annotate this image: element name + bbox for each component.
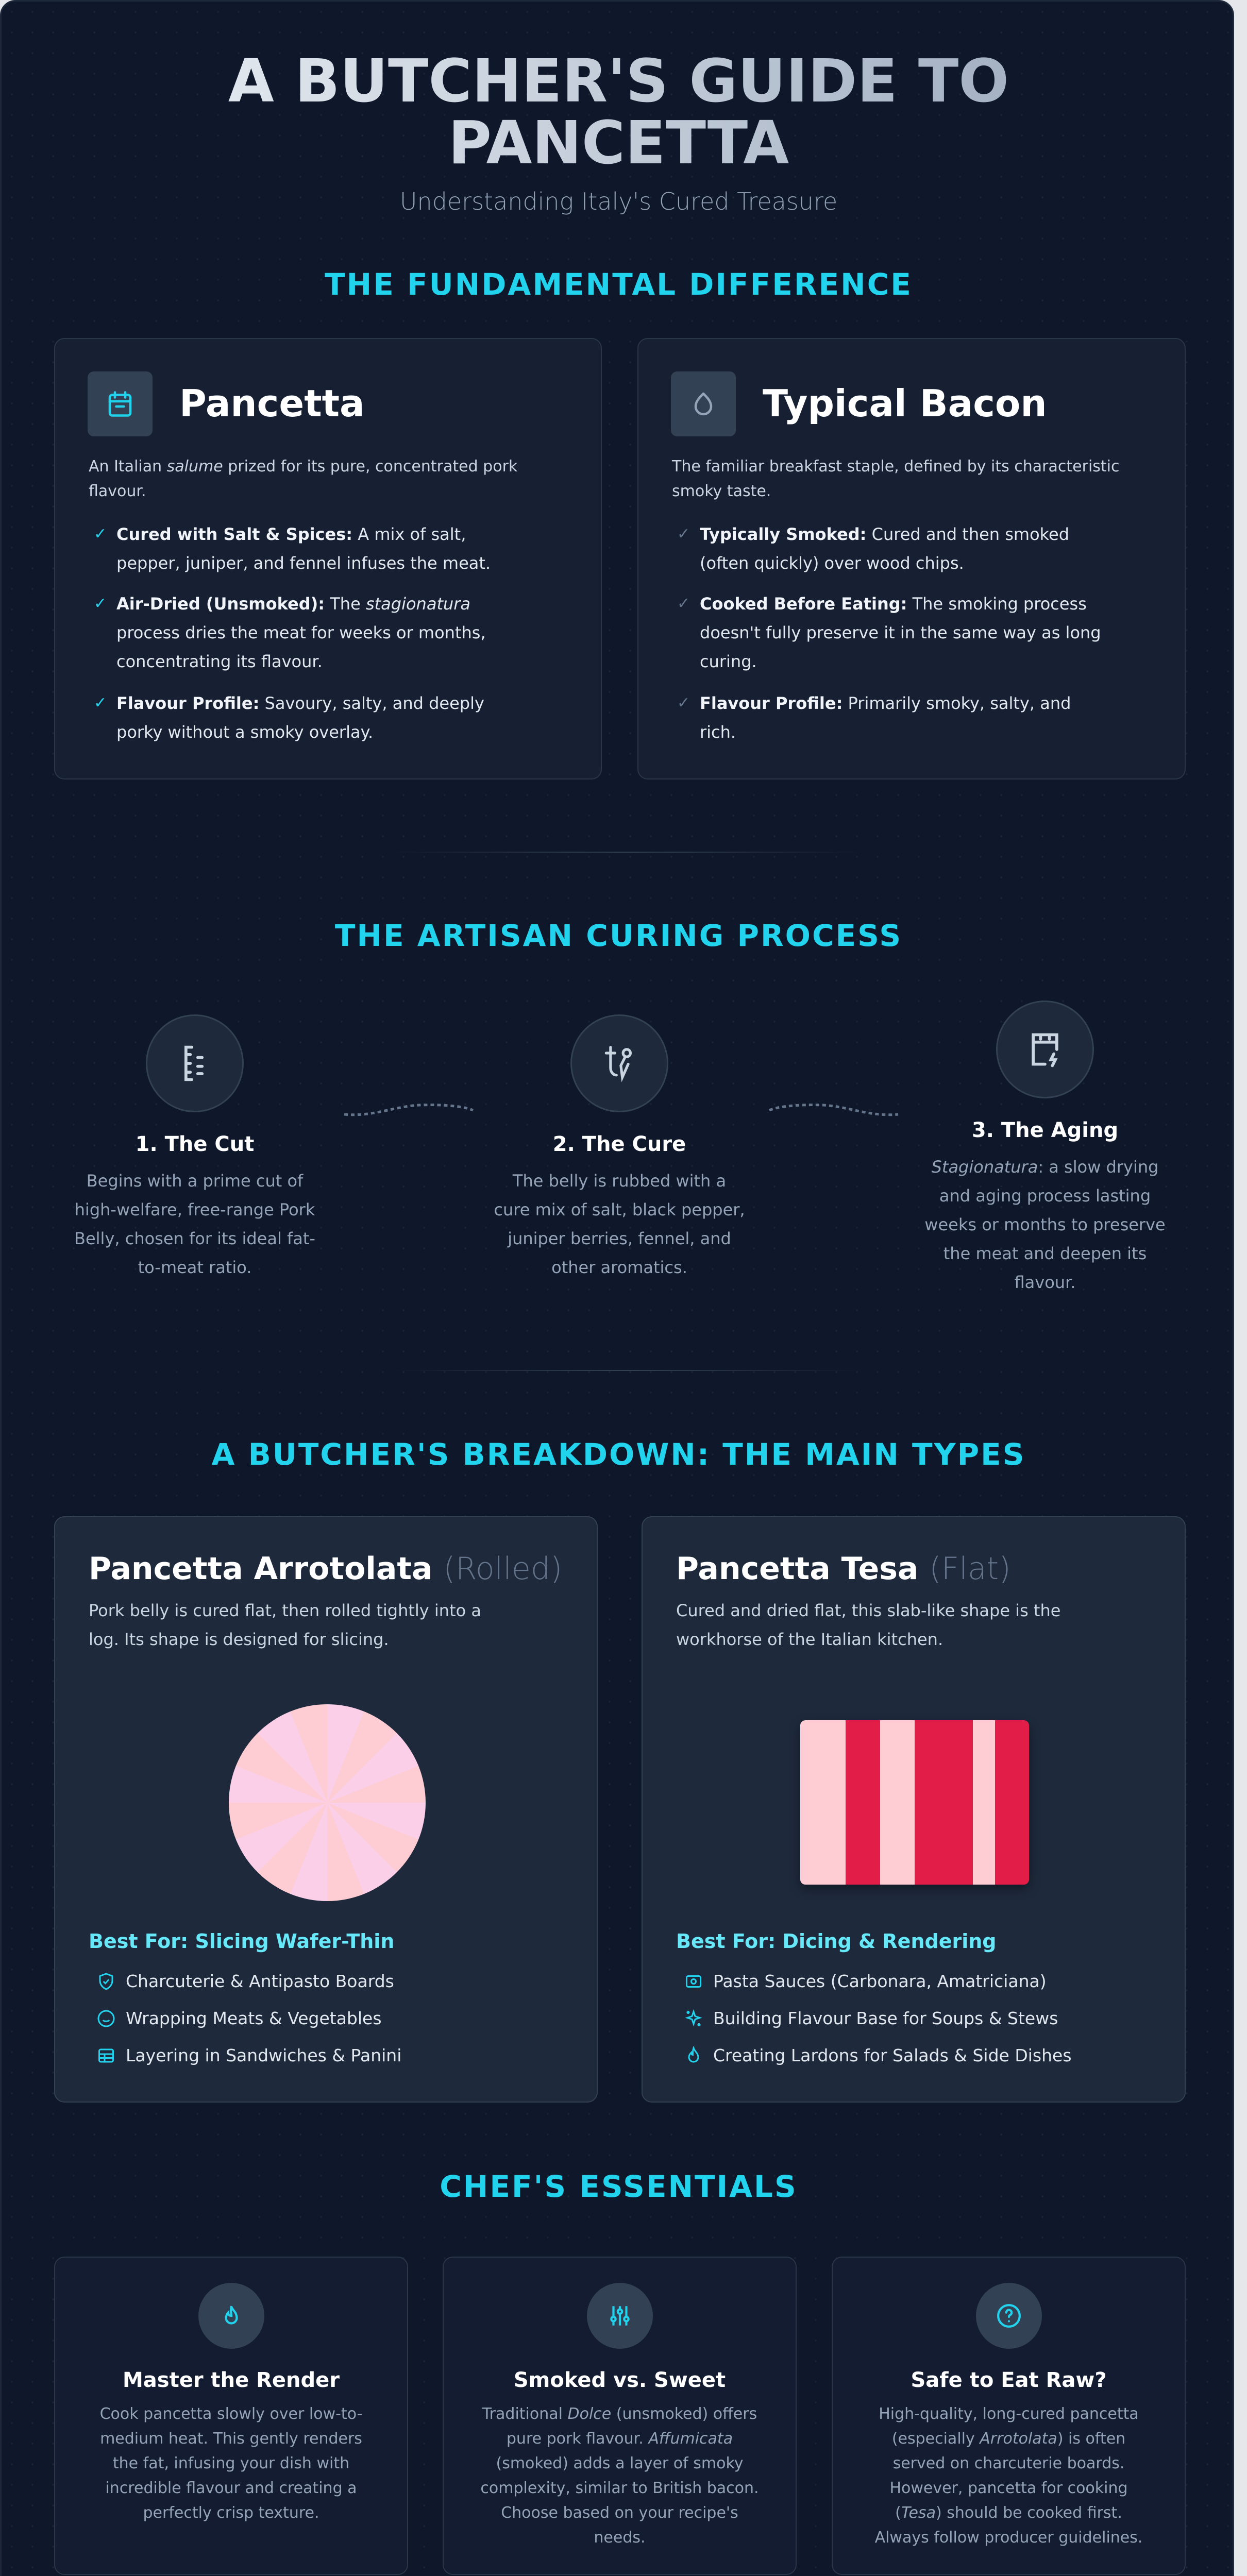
icon: cure xyxy=(570,1014,668,1112)
heading: typical bacon: Typical Bacon xyxy=(763,382,1047,425)
heading: best for slicing: Best For: Slicing Wafer-Thin xyxy=(89,1930,394,1953)
step 2: the cure: other aromatics. xyxy=(551,1258,687,1277)
text: arrotolata description: log. Its shape is designed for slicing. xyxy=(89,1630,389,1649)
list: tesa uses: Creating Lardons for Salads & Side Dishes xyxy=(713,2045,1072,2065)
list: bacon features: doesn't fully preserve it in the same way as long xyxy=(700,623,1101,642)
panel: safe to eat raw: (Tesa) should be cooked first. xyxy=(895,2504,1122,2522)
icon: aging xyxy=(996,1001,1094,1098)
panel: smoked vs sweet: pure pork flavour. Affumicata xyxy=(507,2430,733,2448)
panel: master the render: perfectly crisp texture. xyxy=(143,2504,319,2522)
text: pancetta description xyxy=(89,457,517,500)
panel: smoked vs sweet: Traditional Dolce (unsmoked) offers xyxy=(482,2405,757,2423)
step 1: the cut: high-welfare, free-range Pork xyxy=(75,1200,315,1219)
panel: safe to eat raw: High-quality, long-cured pancetta xyxy=(879,2405,1139,2423)
arrow: wavy connector 1 xyxy=(344,1104,474,1116)
panel: pancetta arrotolata xyxy=(54,1516,598,2103)
heading: best for dicing: Best For: Dicing & Rendering xyxy=(676,1930,997,1953)
title: PANCETTA xyxy=(448,109,789,178)
title: A BUTCHER'S GUIDE TO xyxy=(228,47,1009,116)
heading: arrotolata: Pancetta Arrotolata (Rolled) xyxy=(89,1551,562,1587)
list: pancetta features: porky without a smoky overlay. xyxy=(116,722,373,742)
icon: sliders xyxy=(587,2283,653,2349)
text: arrotolata description: Pork belly is cured flat, then rolled tightly into a xyxy=(89,1601,481,1620)
panel: typical bacon: ✓ xyxy=(677,595,690,613)
list: bacon features: Flavour Profile: Primarily smoky, salty, and xyxy=(700,693,1071,713)
panel: master the render: Cook pancetta slowly over low-to- xyxy=(100,2405,362,2423)
panel: typical bacon xyxy=(637,338,1186,779)
heading: the artisan curing process: THE ARTISAN CURING PROCESS xyxy=(335,918,902,953)
heading: tesa: Pancetta Tesa (Flat) xyxy=(676,1551,1011,1587)
icon: flame xyxy=(198,2283,264,2349)
text: smoked vs sweet: Smoked vs. Sweet xyxy=(514,2368,726,2392)
step 2: the cure: cure mix of salt, black pepper, xyxy=(494,1200,745,1219)
text: step 1: 1. The Cut xyxy=(136,1132,254,1156)
illustration: flat slab xyxy=(800,1720,1029,1885)
panel: safe to eat raw: served on charcuterie boards. xyxy=(893,2454,1124,2472)
heading: pancetta: Pancetta xyxy=(179,382,365,425)
step 3: the aging: Stagionatura: a slow drying xyxy=(932,1157,1158,1177)
list: pancetta features: process dries the meat for weeks or months, xyxy=(116,623,486,642)
list: arrotolata uses xyxy=(98,1971,401,2065)
text: pancetta description: An Italian salume prized for its pure, concentrated pork xyxy=(89,457,517,476)
subtitle: Understanding Italy's Cured Treasure xyxy=(400,188,837,215)
title xyxy=(2,50,1236,174)
list: tesa uses xyxy=(685,1971,1072,2065)
icon: calendar xyxy=(88,371,153,436)
panel: safe to eat raw: However, pancetta for cooking xyxy=(889,2479,1128,2497)
text: step 3: 3. The Aging xyxy=(972,1118,1118,1142)
panel: safe to eat raw xyxy=(832,2257,1186,2575)
panel: pancetta: ✓ xyxy=(94,525,107,543)
step 3: the aging: flavour. xyxy=(1015,1273,1075,1292)
text: pancetta description: flavour. xyxy=(89,482,146,500)
panel: pancetta: ✓ xyxy=(94,694,107,712)
list: pancetta features xyxy=(94,524,491,742)
panel: master the render: incredible flavour and creating a xyxy=(105,2479,357,2497)
text: tesa description: workhorse of the Italian kitchen. xyxy=(676,1630,943,1649)
step 1: the cut: to-meat ratio. xyxy=(138,1258,251,1277)
step 1: the cut xyxy=(74,1014,315,1277)
list: pancetta features: Flavour Profile: Savoury, salty, and deeply xyxy=(116,693,484,713)
step 2: the cure: juniper berries, fennel, and xyxy=(508,1229,731,1248)
icon: cut xyxy=(146,1014,244,1112)
heading: chef's essentials: CHEF'S ESSENTIALS xyxy=(440,2169,798,2204)
heading: main types: A BUTCHER'S BREAKDOWN: THE MAIN TYPES xyxy=(211,1437,1026,1472)
panel: typical bacon: ✓ xyxy=(677,525,690,543)
step 2: the cure: The belly is rubbed with a xyxy=(513,1171,726,1191)
panel: smoked vs sweet: (smoked) adds a layer of smoky xyxy=(496,2454,744,2472)
icon: cloud xyxy=(671,371,736,436)
step 3: the aging: the meat and deepen its xyxy=(943,1244,1147,1263)
list: bacon features: (often quickly) over wood chips. xyxy=(700,553,964,573)
text: master the render: Master the Render xyxy=(123,2368,340,2392)
illustration: rolled pancetta xyxy=(229,1704,426,1901)
panel: smoked vs sweet: Choose based on your recipe's xyxy=(501,2504,738,2522)
text: bacon description xyxy=(672,457,1120,500)
panel: smoked vs sweet: needs. xyxy=(594,2529,646,2547)
panel: pancetta xyxy=(54,338,602,779)
panel: pancetta tesa xyxy=(642,1516,1186,2103)
step 3: the aging: weeks or months to preserve xyxy=(924,1215,1166,1234)
text: tesa description xyxy=(676,1601,1060,1649)
panel: smoked vs sweet xyxy=(443,2257,797,2575)
list: arrotolata uses: Charcuterie & Antipasto Boards xyxy=(126,1971,394,1991)
panel: safe to eat raw: (especially Arrotolata) is often xyxy=(892,2430,1125,2448)
step 1: the cut: Begins with a prime cut of xyxy=(87,1171,303,1191)
text: step 2: 2. The Cure xyxy=(553,1132,686,1156)
arrow: wavy connector 2 xyxy=(769,1104,899,1116)
step 1: the cut: Belly, chosen for its ideal fat- xyxy=(74,1229,315,1248)
step 3: the aging xyxy=(924,1001,1166,1292)
icon: question xyxy=(976,2283,1042,2349)
list: tesa uses: Pasta Sauces (Carbonara, Amatriciana) xyxy=(713,1971,1047,1991)
panel: typical bacon: ✓ xyxy=(677,694,690,712)
text: tesa description: Cured and dried flat, this slab-like shape is the xyxy=(676,1601,1060,1620)
list: pancetta features: Air-Dried (Unsmoked): The stagionatura xyxy=(116,594,470,614)
panel: master the render xyxy=(54,2257,408,2575)
list: bacon features xyxy=(677,524,1101,742)
panel: pancetta: ✓ xyxy=(94,595,107,613)
list: bacon features: curing. xyxy=(700,652,757,671)
list: pancetta features: concentrating its flavour. xyxy=(116,652,323,671)
text: safe to eat raw: Safe to Eat Raw? xyxy=(911,2368,1107,2392)
step 3: the aging: and aging process lasting xyxy=(939,1186,1151,1206)
panel: master the render: the fat, infusing your dish with xyxy=(113,2454,349,2472)
list: pancetta features: pepper, juniper, and fennel infuses the meat. xyxy=(116,553,491,573)
panel: safe to eat raw: Always follow producer guidelines. xyxy=(875,2529,1142,2547)
text: arrotolata description xyxy=(89,1601,481,1649)
list: tesa uses: Building Flavour Base for Soups & Stews xyxy=(713,2008,1058,2028)
panel: master the render: medium heat. This gently renders xyxy=(100,2430,362,2448)
heading: the fundamental difference: THE FUNDAMENTAL DIFFERENCE xyxy=(325,267,913,302)
list: bacon features: Typically Smoked: Cured and then smoked xyxy=(700,524,1069,544)
list: pancetta features: Cured with Salt & Spices: A mix of salt, xyxy=(116,524,466,544)
panel: smoked vs sweet: complexity, similar to British bacon. xyxy=(480,2479,759,2497)
list: bacon features: Cooked Before Eating: The smoking process xyxy=(700,594,1087,614)
list: arrotolata uses: Layering in Sandwiches & Panini xyxy=(126,2045,401,2065)
text: bacon description: The familiar breakfast staple, defined by its characteristic xyxy=(672,457,1120,476)
text: bacon description: smoky taste. xyxy=(672,482,771,500)
step 2: the cure xyxy=(494,1014,745,1277)
list: bacon features: rich. xyxy=(700,722,736,742)
list: arrotolata uses: Wrapping Meats & Vegetables xyxy=(126,2008,382,2028)
